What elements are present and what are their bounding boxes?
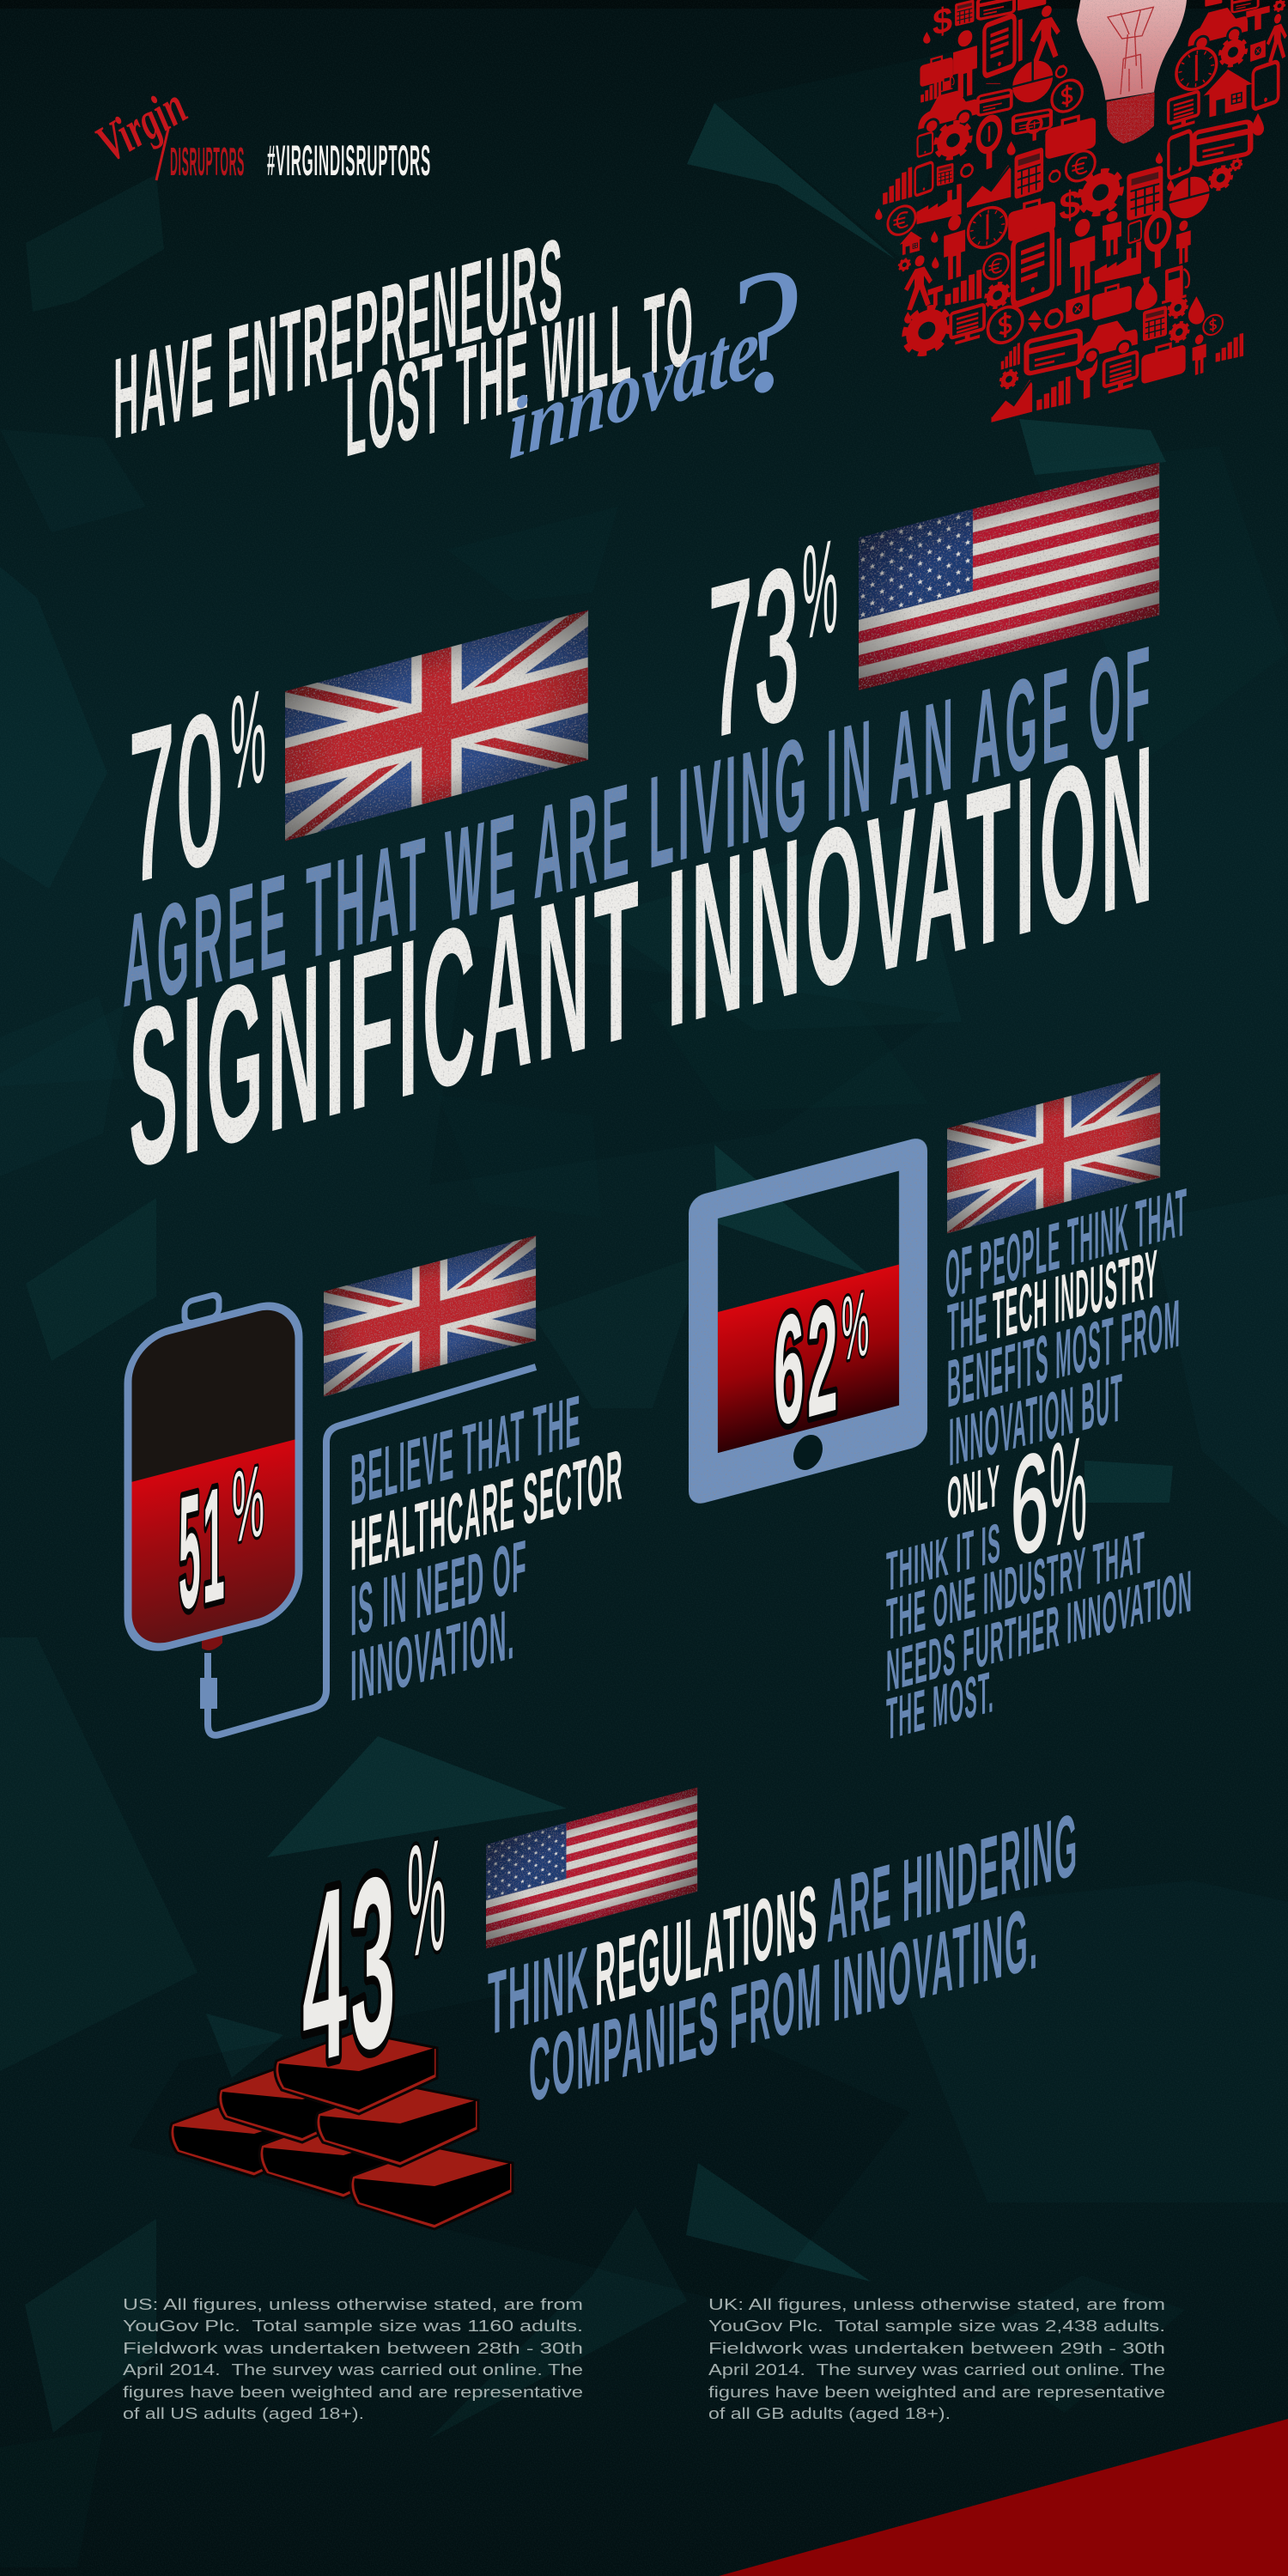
icon: stack of red tape bricks [170, 2032, 513, 2229]
text: believe [350, 1380, 623, 1716]
logo: Virgin Disruptors [87, 76, 245, 184]
tablet red fill [718, 1265, 899, 1453]
text: BELIEVE THAT THE [350, 1380, 581, 1521]
stat: 70% UK: 70 [129, 666, 225, 927]
icon: light bulb [1077, 0, 1187, 143]
panel: blood bag 51% [128, 1232, 623, 1735]
stat: 70% UK: % [230, 660, 266, 818]
flag: US [859, 462, 1159, 690]
text: tech: THE [947, 1280, 988, 1366]
tube connector [200, 1678, 217, 1709]
tube [208, 1367, 536, 1735]
icon: blood bag [128, 1273, 299, 1672]
text: DISRUPTORS [170, 139, 245, 184]
footnote: US: of all US adults (aged 18+). [123, 2404, 364, 2422]
text: regulations: REGULATIONS [595, 1866, 818, 2026]
footnote: US: April 2014. The survey was carried out online. The [123, 2360, 583, 2379]
footnote: UK: YouGov Plc. Total sample size was 2,438 adults. [708, 2317, 1165, 2335]
text: tech: ONLY [947, 1452, 1000, 1532]
text: regulations: THINK [488, 1928, 590, 2055]
text: #VIRGINDISRUPTORS [267, 137, 431, 185]
panel: tablet 62%: % [841, 1271, 871, 1381]
stat: 73% US: 73 [708, 521, 801, 782]
footnote: US: figures have been weighted and are representative [123, 2383, 583, 2401]
text: tech: THINK IT IS [886, 1510, 1001, 1603]
footnote: US: Fieldwork was undertaken between 28th - 30th [123, 2339, 583, 2357]
footnote: US: YouGov Plc. Total sample size was 1160 adults. [123, 2317, 583, 2335]
icon cluster: head made of business icons with light bulb [875, 0, 1287, 422]
icons: scattered pictograms: $ [1059, 180, 1083, 229]
text: believe: IS IN NEED OF [350, 1525, 527, 1651]
icon: tablet [689, 1135, 927, 1507]
footnote: US [123, 2295, 583, 2422]
stat: 73% US [708, 462, 1159, 782]
text: tech: % [1049, 1405, 1087, 1579]
text: regulations [488, 1795, 1078, 2122]
footnote: UK: of all GB adults (aged 18+). [708, 2404, 951, 2422]
title [113, 212, 695, 481]
logo script tail [156, 129, 168, 180]
panel: blood bag 51%: 51 [179, 1451, 227, 1644]
flag: UK [324, 1232, 536, 1400]
footnote: UK: April 2014. The survey was carried out online. The [708, 2360, 1165, 2379]
stat: 70% UK [129, 606, 588, 927]
panel: regulations 43%: 43 [302, 1820, 399, 2117]
footnote: US: US: All figures, unless otherwise stated, are from [123, 2295, 583, 2313]
footnote: UK: UK: All figures, unless otherwise stated, are from [708, 2295, 1165, 2313]
panel: blood bag 51%: % [232, 1443, 266, 1565]
text: HEALTHCARE SECTOR [350, 1434, 623, 1586]
text: tech: 6 [1011, 1423, 1048, 1585]
flag: UK [285, 606, 588, 845]
tablet frame [689, 1135, 927, 1507]
flag: UK [947, 1069, 1160, 1236]
text: tech [886, 1174, 1193, 1753]
footnote: UK: Fieldwork was undertaken between 29th - 30th [708, 2339, 1165, 2357]
logo script: Virgin [87, 76, 197, 173]
icons: scattered pictograms [875, 0, 1287, 422]
footnote: UK: figures have been weighted and are representative [708, 2383, 1165, 2401]
flag: US [486, 1788, 697, 1948]
stat: 73% US: % [802, 510, 838, 668]
text: believe: INNOVATION. [350, 1593, 515, 1716]
panel: tablet 62%: 62 [774, 1268, 841, 1459]
text: tech: THE MOST. [886, 1658, 994, 1753]
red corner triangle [719, 2419, 1288, 2576]
panel: tablet 62% [689, 1069, 1193, 1753]
panel: regulations 43%: % [407, 1803, 448, 1991]
question mark: ? [732, 226, 804, 435]
footnote: UK [708, 2295, 1165, 2422]
title word: innovate: innovate [508, 298, 759, 478]
panel: regulations 43% [170, 1788, 1078, 2229]
tablet button [793, 1431, 823, 1473]
